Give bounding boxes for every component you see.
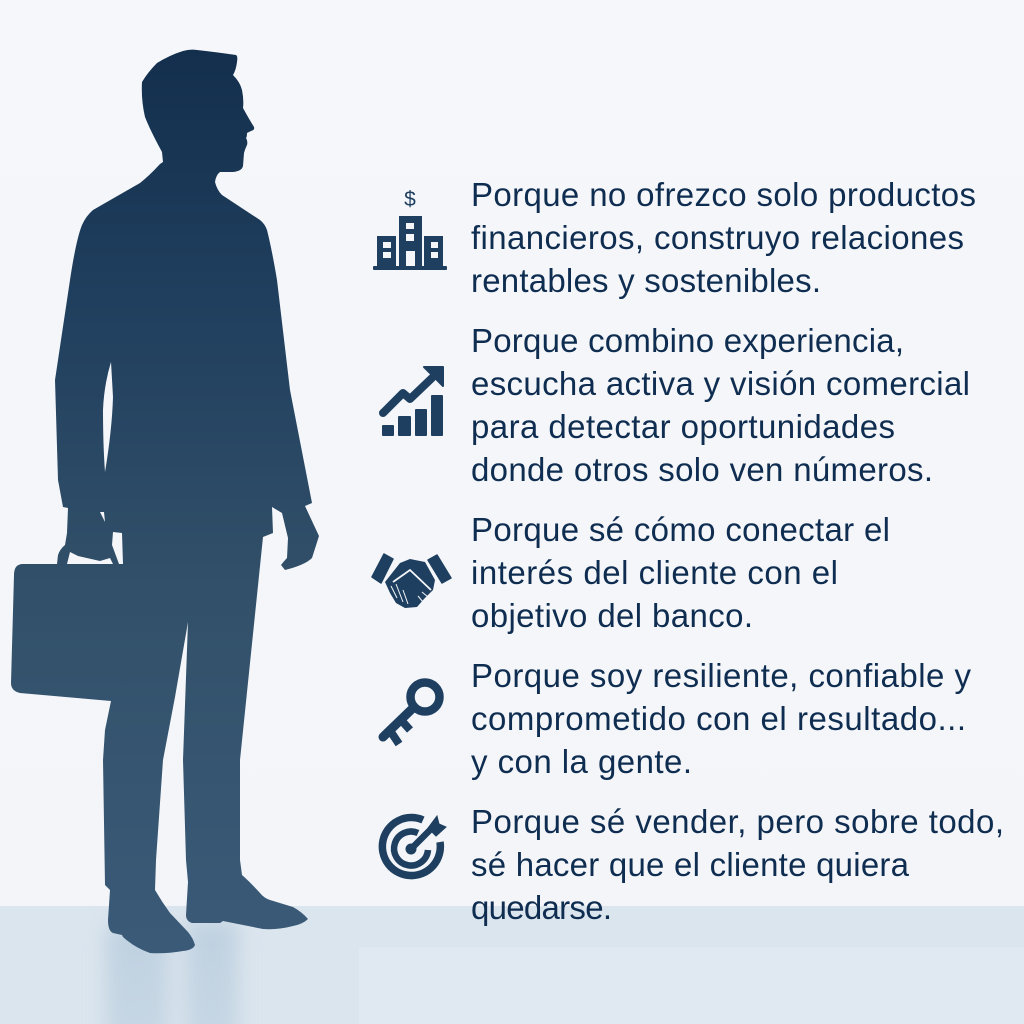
text: reason 2 [471,322,970,488]
figure reflection [106,920,238,1024]
text: reason 1: Porque no ofrezco solo productos [471,176,976,213]
reason 5 [382,803,1004,926]
icon: key [383,682,440,744]
text: reason 4: comprometido con el resultado... [471,700,966,737]
text: reason 1: financieros, construyo relaciones [471,219,964,256]
text: reason 5: Porque sé vender, pero sobre todo, [471,803,1004,840]
silhouette: businessman with briefcase [11,50,319,953]
text: reason 1: rentables y sostenibles. [471,262,821,299]
text: reason 5 [471,803,1004,926]
icon: bank buildings with dollar [373,188,447,270]
text: reason 5: sé hacer que el cliente quiera [471,846,910,883]
icon: handshake [372,554,451,608]
reason 3 [372,511,890,634]
text: reason 2: donde otros solo ven números. [471,451,933,488]
text: reason 4: y con la gente. [471,743,692,780]
text: reason 2: Porque combino experiencia, [471,322,904,359]
text: reason 2: escucha activa y visión comercial [471,365,970,402]
reason 1 [373,176,976,299]
reason 4 [383,657,972,780]
text: reason 3: Porque sé cómo conectar el [471,511,890,548]
icon: bank buildings with dollar: $ [404,188,416,211]
reason 2 [382,322,970,488]
text: reason 3: interés del cliente con el [471,554,838,591]
text: reason 3 [471,511,890,634]
text: reason 2: para detectar oportunidades [471,408,895,445]
icon: target with arrow [382,816,446,876]
icon: growth chart with arrow [382,367,443,436]
text: reason 4: Porque soy resiliente, confiable y [471,657,972,694]
text: reason 3: objetivo del banco. [471,597,753,634]
floor [0,906,1024,1024]
text: reason 1 [471,176,976,299]
text: reason 4 [471,657,972,780]
text: reason 5: quedarse. [471,889,612,926]
